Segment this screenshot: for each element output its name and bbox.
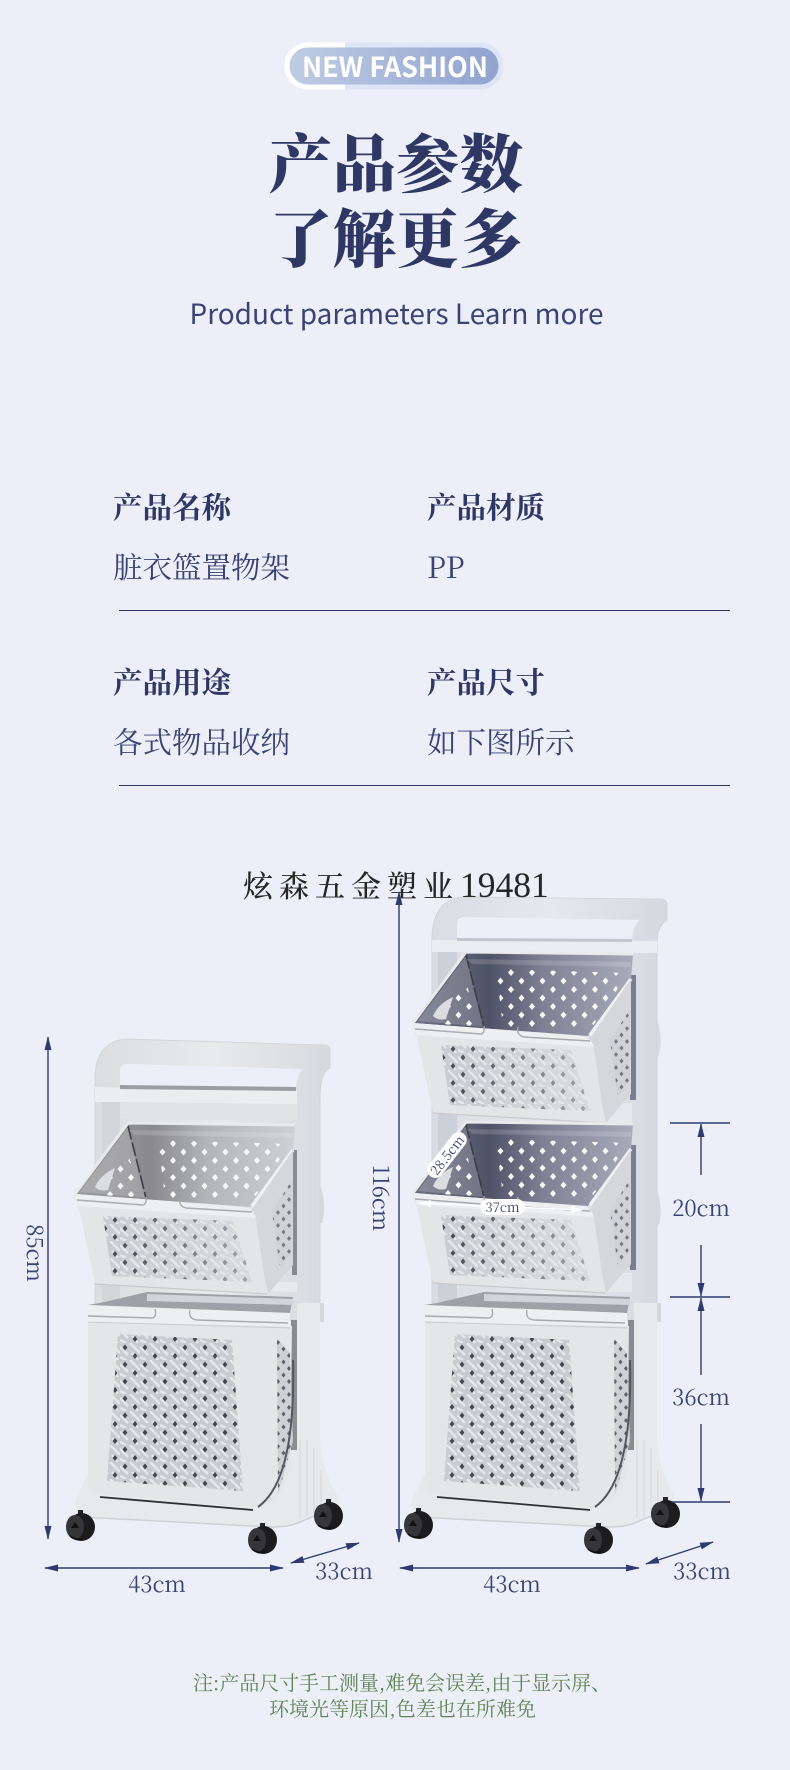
product material — [427, 485, 545, 587]
dimension: left width 43cm: 43cm — [128, 1568, 186, 1599]
callout: basket width 37cm: 37cm — [485, 1197, 520, 1216]
wheels — [404, 1497, 680, 1554]
dimension: left height 85cm: 85cm — [20, 1224, 51, 1282]
dimension: basket gap 20cm: 20cm — [672, 1192, 730, 1223]
lower basket — [87, 1292, 293, 1510]
frame — [432, 897, 667, 1320]
upper basket 2 — [413, 1122, 633, 1293]
footnote: 注:产品尺寸手工测量,难免会误差,由于显示屏、 — [193, 1667, 611, 1696]
title — [269, 115, 523, 281]
title: 了解更多 — [269, 190, 523, 281]
product material: PP — [427, 545, 465, 587]
upper basket 1 — [413, 952, 633, 1123]
dimension: right height 116cm: 116cm — [366, 1165, 397, 1231]
dimension: left depth 33cm: 33cm — [315, 1555, 373, 1586]
product name: 脏衣篮置物架 — [113, 545, 290, 587]
parameters table — [113, 485, 730, 786]
footnote — [193, 1667, 611, 1722]
frame — [95, 1039, 330, 1320]
watermark: 19481 — [460, 865, 549, 905]
base — [75, 1303, 338, 1527]
product use: 各式物品收纳 — [113, 720, 290, 762]
dimension: right width 43cm: 43cm — [483, 1568, 541, 1599]
product size: 产品尺寸 — [427, 660, 545, 702]
product size: 如下图所示 — [427, 720, 575, 762]
product material: 产品材质 — [427, 485, 545, 527]
product name: 产品名称 — [113, 485, 234, 527]
dimension: left depth 33cm — [291, 1543, 373, 1586]
footnote: 环境光等原因,色差也在所难免 — [269, 1693, 536, 1722]
wheels — [66, 1499, 343, 1554]
product use — [113, 660, 290, 762]
right rack: three tier — [404, 897, 680, 1554]
product name — [113, 485, 290, 587]
left rack: two tier — [66, 1039, 343, 1554]
title: 产品参数 — [269, 115, 523, 206]
base — [412, 1303, 675, 1527]
upper basket — [75, 1123, 295, 1294]
dimension: right depth 33cm — [646, 1542, 731, 1586]
product use: 产品用途 — [113, 660, 233, 702]
product size — [427, 660, 575, 762]
watermark: 炫森五金塑业 — [243, 862, 459, 906]
badge: NEW FASHION: NEW FASHION — [302, 46, 488, 86]
callout: basket width 37cm — [420, 1197, 582, 1216]
dimension: right depth 33cm: 33cm — [673, 1555, 731, 1586]
callout: basket depth 28.5cm: 28.5cm — [425, 1131, 468, 1179]
subtitle: Product parameters Learn more — [190, 293, 604, 333]
dimension: lower basket 36cm: 36cm — [672, 1381, 730, 1412]
lower basket — [424, 1292, 630, 1510]
